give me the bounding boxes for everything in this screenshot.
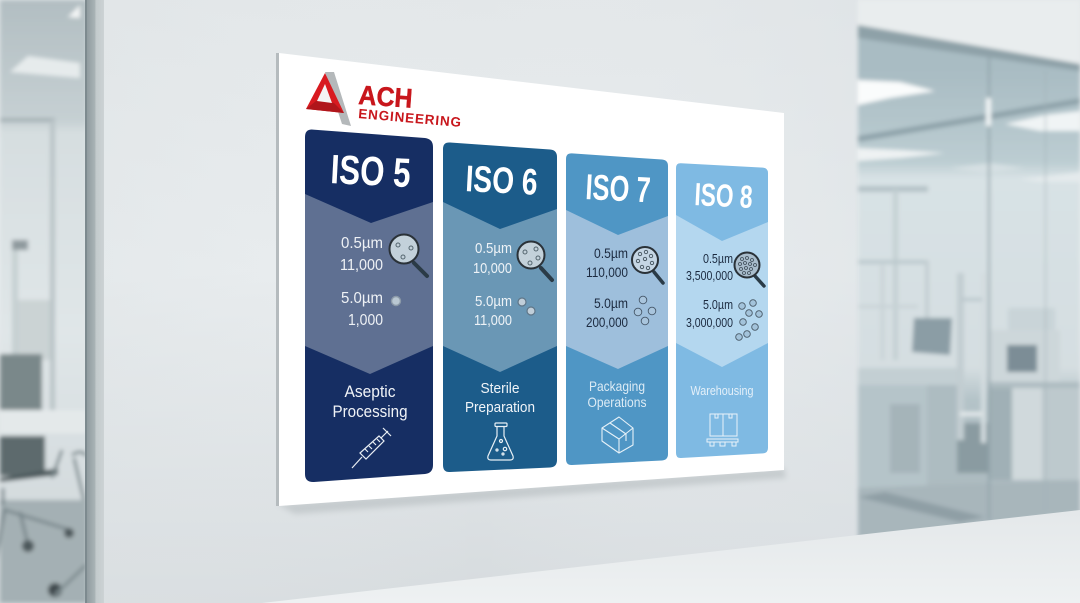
particle figures: 11,000 [340,257,383,274]
icon: logo triangle [306,72,351,126]
application label [588,378,646,410]
particle figures: 11,000 [474,312,512,329]
foreground counter [262,510,1080,603]
particle figures: 0.5µm [594,245,628,261]
card background [305,130,433,482]
door frame [85,0,104,603]
particle figures [686,251,733,330]
heading: ISO 8 [694,176,753,215]
heading: ISO 6 [465,158,539,203]
heading: ISO 5 [330,146,412,196]
particle figures: 0.5µm [341,235,383,252]
icon: magnifier with few particles [390,234,427,276]
logo: ACH Engineering [306,72,462,130]
application label: Preparation [465,399,535,416]
particle figures [340,235,383,329]
application label: Sterile [480,380,520,397]
icon: large particles [634,296,656,325]
particle figures: 10,000 [473,260,512,277]
card background [676,163,768,458]
right glass laboratory scene [858,0,1080,540]
particle figures: 5.0µm [341,290,383,307]
logo wordmark ACH: ACH [358,80,414,114]
heading: ISO 7 [585,166,652,210]
application label: Packaging [589,378,645,394]
particle figures: 1,000 [348,312,383,329]
icon: box [602,417,633,453]
poster board [276,53,784,506]
card background [566,153,668,465]
icon: magnifier with particles [518,242,552,280]
particle figures [586,245,628,330]
particle figures: 3,000,000 [686,315,733,330]
particle figures: 3,500,000 [686,268,733,283]
particle figures: 5.0µm [703,297,733,312]
panel: ISO 6 [443,142,557,472]
icon: large particle [392,296,400,306]
particle figures: 110,000 [586,264,628,280]
particle figures: 5.0µm [594,295,628,311]
application label: Warehousing [690,383,754,398]
logo wordmark Engineering: ENGINEERING [358,106,462,130]
particle figures [473,240,512,329]
particle count band [676,215,768,367]
icon: magnifier with many particles [632,247,663,283]
application label [465,380,535,416]
application label: Aseptic [344,383,396,401]
icon: syringe [352,428,391,468]
application label: Operations [588,394,646,410]
card background [443,142,557,472]
particle figures: 0.5µm [703,251,733,266]
particle figures: 5.0µm [475,293,512,310]
icon: large particles [518,298,535,315]
icon: magnifier densely filled with particles [734,252,764,286]
particle count band [305,194,433,374]
application label: Processing [332,403,408,421]
panel: ISO 8 [676,163,768,458]
icon: flask [488,423,513,460]
poster shadow [277,468,786,514]
particle count band [566,210,668,369]
particle figures: 0.5µm [475,240,512,257]
application label [332,383,408,421]
left glass office scene [0,0,87,603]
icon: large particles [736,300,762,340]
particle figures: 200,000 [586,314,628,330]
particle count band [443,202,557,372]
panel: ISO 7 [566,153,668,465]
icon: pallet with boxes [707,414,738,446]
panel: ISO 5 [305,130,433,482]
